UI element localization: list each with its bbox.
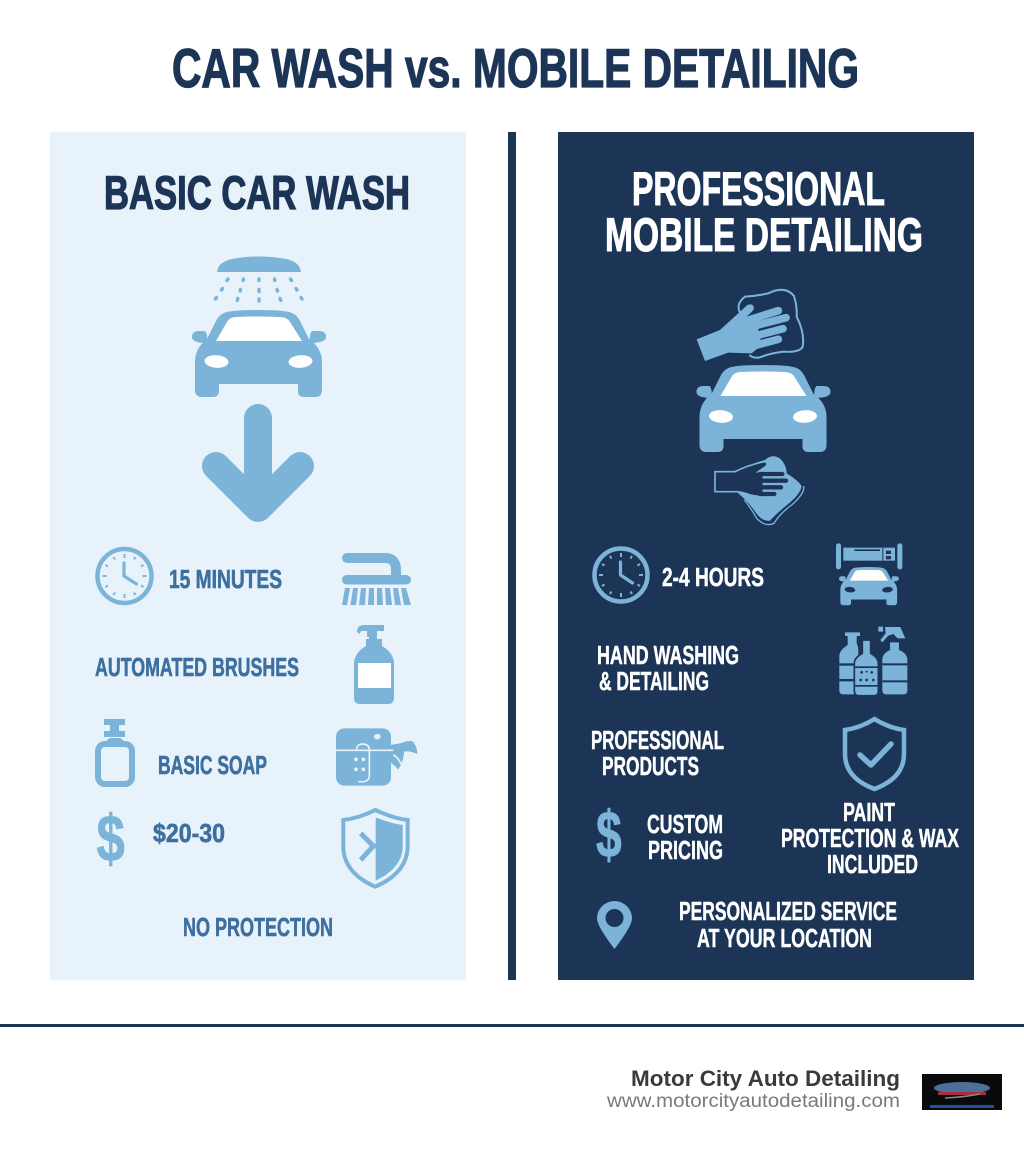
icon: professional product bottles bbox=[839, 627, 907, 696]
icon: car bbox=[696, 365, 830, 452]
divider bbox=[508, 132, 516, 980]
arrow: down bbox=[216, 418, 300, 508]
text: personalized service at your location: AT YOUR LOCATION bbox=[697, 925, 872, 953]
text: automated brushes: AUTOMATED BRUSHES bbox=[95, 654, 299, 682]
text: $20-30: $20-30 bbox=[153, 820, 225, 848]
text: professional products: PRODUCTS bbox=[602, 753, 699, 781]
icon: clock bbox=[594, 548, 648, 602]
heading: basic car wash: BASIC CAR WASH bbox=[104, 166, 410, 219]
icon: dollar: $ bbox=[96, 803, 125, 876]
text: professional products: PROFESSIONAL bbox=[591, 727, 724, 755]
icon: hand wiping bbox=[715, 456, 804, 525]
logo bbox=[922, 1074, 1002, 1110]
icon: dollar: $ bbox=[596, 798, 622, 872]
footer: company name and website bbox=[606, 1066, 900, 1112]
text: 2-4 hours: 2-4 HOURS bbox=[662, 564, 764, 592]
icon: shield with check bbox=[845, 719, 904, 789]
text: 15 minutes: 15 MINUTES bbox=[169, 566, 282, 594]
heading: professional mobile detailing bbox=[605, 162, 923, 261]
icon: location pin bbox=[597, 901, 632, 949]
text: personalized service at your location bbox=[679, 898, 897, 953]
text: custom pricing: CUSTOM bbox=[647, 811, 723, 839]
panel: professional mobile detailing bbox=[558, 132, 974, 980]
text: hand washing and detailing bbox=[597, 642, 739, 696]
text: hand washing and detailing: HAND WASHING bbox=[597, 642, 739, 670]
text: custom pricing bbox=[647, 811, 723, 865]
text: personalized service at your location: PERSONALIZED SERVICE bbox=[679, 898, 897, 926]
icon: overhead spray bbox=[216, 256, 302, 301]
text: paint protection and wax included: PAINT bbox=[843, 799, 895, 827]
text: custom pricing: PRICING bbox=[648, 837, 723, 865]
icon: brush bbox=[342, 558, 411, 605]
text: no protection: NO PROTECTION bbox=[183, 914, 333, 942]
text: paint protection and wax included: INCLUDED bbox=[827, 851, 918, 879]
text: professional products bbox=[591, 727, 724, 781]
text: basic soap: BASIC SOAP bbox=[158, 752, 267, 780]
panel: basic car wash bbox=[50, 132, 466, 980]
icon: hand with towel bbox=[697, 290, 803, 361]
footer rule bbox=[0, 1024, 1024, 1027]
icon: sponge bbox=[336, 728, 417, 786]
icon: broken shield bbox=[343, 810, 408, 887]
icon: car in wash bay bbox=[836, 543, 902, 605]
icon: pump bottle bbox=[354, 625, 394, 704]
footer: company name and website: www.motorcityautodetailing.com bbox=[606, 1091, 900, 1112]
icon: soap bottle bbox=[98, 719, 132, 784]
text: hand washing and detailing: & DETAILING bbox=[599, 668, 709, 696]
heading: professional mobile detailing: PROFESSIONAL bbox=[632, 162, 885, 215]
text: paint protection and wax included bbox=[781, 799, 959, 879]
icon: car bbox=[192, 310, 326, 397]
footer: company name and website: Motor City Auto Detailing bbox=[631, 1066, 900, 1091]
icon: clock bbox=[98, 549, 152, 603]
